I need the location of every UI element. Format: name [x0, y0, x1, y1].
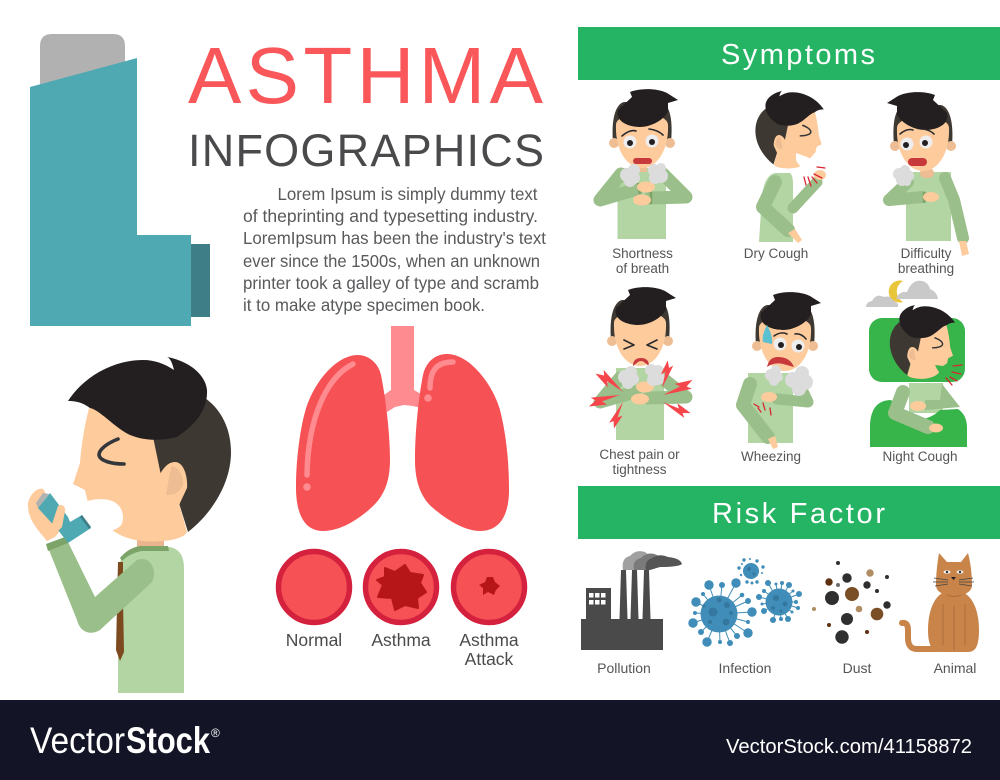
title: ASTHMA [188, 31, 544, 120]
risk: animal cat [902, 553, 979, 676]
watermark footer bar: Stock [126, 720, 210, 761]
symptom: shortness of breath: of breath [616, 261, 669, 276]
watermark footer bar: VectorStock.com/41158872 [726, 735, 972, 758]
symptom: wheezing: Wheezing [741, 449, 801, 464]
airway: asthma attack: Attack [465, 649, 514, 669]
intro text block: it to make atype specimen book. [243, 295, 485, 315]
intro text block: of theprinting and typesetting industry. [243, 206, 538, 226]
watermark footer bar [0, 700, 1000, 780]
airway: asthma attack [454, 552, 524, 669]
airway: asthma [366, 552, 436, 650]
intro text block: ever since the 1500s, when an unknown [243, 251, 540, 271]
symptom: chest pain or tightness [587, 287, 695, 477]
intro text block: Lorem Ipsum is simply dummy text [278, 184, 538, 204]
risk: animal cat: Animal [934, 660, 976, 676]
risk factor header: Risk Factor [712, 498, 885, 530]
symptoms header [578, 27, 1000, 80]
title: INFOGRAPHICS [188, 125, 544, 176]
risk: infection viruses [688, 558, 802, 676]
risk: dust particles [812, 561, 891, 676]
airway: asthma attack: Asthma [459, 630, 519, 650]
symptoms header: Symptoms [721, 39, 875, 71]
risk: pollution factory: Pollution [597, 660, 651, 676]
symptom: chest pain or tightness: Chest pain or [599, 447, 680, 462]
airway: asthma: Asthma [371, 630, 431, 650]
symptom: dry cough: Dry Cough [744, 246, 808, 261]
man using inhaler [28, 357, 231, 693]
risk: dust particles: Dust [843, 660, 871, 676]
symptom: shortness of breath: Shortness [612, 246, 673, 261]
symptom: difficulty breathing: Difficulty [901, 246, 952, 261]
risk factor header [578, 486, 1000, 539]
symptom: difficulty breathing [887, 92, 969, 276]
watermark footer bar: Vector [30, 720, 125, 761]
symptom: chest pain or tightness: tightness [612, 462, 667, 477]
airway: normal: Normal [286, 630, 342, 650]
risk: infection viruses: Infection [719, 660, 771, 676]
inhaler illustration [30, 34, 210, 326]
airway: normal [278, 552, 350, 650]
intro text block [243, 184, 546, 315]
symptom: shortness of breath [600, 89, 686, 276]
risk: pollution factory [581, 551, 682, 676]
symptom: night cough: Night Cough [882, 449, 958, 464]
symptom: dry cough [744, 91, 826, 261]
symptom: difficulty breathing: breathing [898, 261, 954, 276]
lungs illustration [296, 326, 509, 531]
watermark footer bar: ® [211, 726, 220, 740]
intro text block: printer took a galley of type and scramb [243, 273, 539, 293]
intro text block: LoremIpsum has been the industry's text [243, 228, 546, 248]
symptom: night cough [866, 280, 967, 464]
title [188, 31, 544, 176]
symptom: wheezing [741, 292, 821, 464]
